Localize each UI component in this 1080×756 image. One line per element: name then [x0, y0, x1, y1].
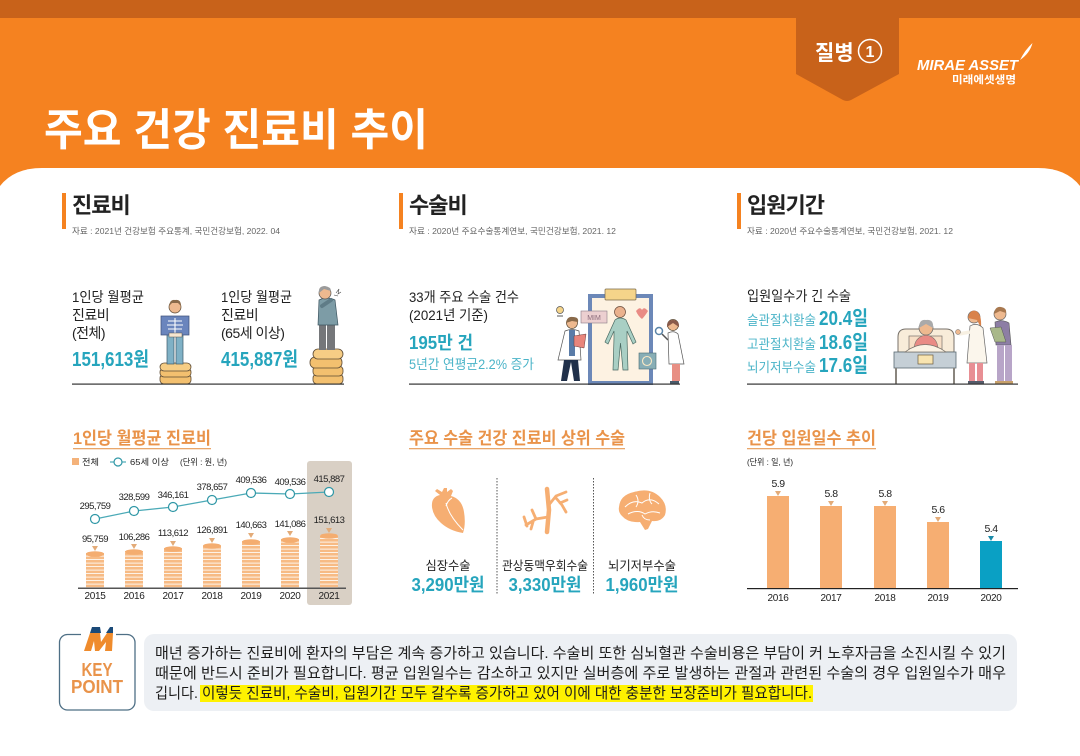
key point badge: POINT	[71, 677, 123, 697]
baseline	[409, 384, 680, 385]
surgery cost: skull base	[606, 559, 678, 595]
stat: long hospital stays: 18.6일	[819, 331, 868, 354]
icon: coronary vessels	[524, 489, 567, 532]
year axis: 2015	[84, 591, 106, 602]
bar chart: length of stay: 5.4	[984, 523, 998, 535]
line values: 328,599	[119, 492, 150, 503]
header band	[0, 0, 1080, 240]
heading: 수술비: 수술비	[409, 193, 467, 218]
baseline	[72, 384, 344, 385]
bar chart: length of stay: 5.8	[824, 488, 838, 500]
stat: long hospital stays: 뇌기저부수술	[747, 360, 816, 375]
stat: 65 and over: 415,887원	[221, 348, 298, 371]
heading: 진료비: 진료비	[72, 193, 130, 218]
stat: long hospital stays	[747, 288, 868, 377]
key point text: 깁니다.	[155, 685, 198, 702]
stat: surgery count	[409, 289, 534, 372]
logo: Mirae Asset	[917, 43, 1032, 86]
column values	[82, 515, 345, 545]
stat: 65 and over	[221, 289, 298, 371]
coin columns	[86, 533, 338, 588]
year axis	[84, 591, 340, 602]
logo: Mirae Asset: 미래에셋생명	[952, 73, 1016, 86]
baseline	[747, 384, 1018, 385]
bar chart: length of stay: 2016	[767, 593, 789, 604]
surgery cost: coronary bypass: 관상동맥우회수술	[502, 559, 588, 573]
chart heading: top surgeries: 주요 수술 건강 진료비 상위 수술	[409, 429, 625, 448]
heading: 입원기간	[737, 193, 953, 236]
year axis: 2018	[201, 591, 223, 602]
year axis: 2019	[240, 591, 262, 602]
icon: man holding x-ray on coins	[160, 300, 191, 384]
stat: 65 and over: 진료비	[221, 307, 258, 323]
line values: 415,887	[314, 474, 345, 485]
icon: patient in bed with doctor and nurse	[894, 307, 1013, 384]
bar chart: length of stay: 5.6	[931, 504, 945, 516]
bar chart: length of stay: 2018	[874, 593, 896, 604]
key point text	[144, 634, 1017, 711]
key point badge: KEY	[82, 660, 112, 680]
legend: 전체	[82, 457, 99, 467]
title: 주요 건강 진료비 추이	[44, 106, 428, 155]
stat: surgery count: 5년간 연평균2.2% 증가	[409, 357, 534, 372]
category ribbon	[796, 18, 899, 101]
heading: 진료비: 자료 : 2021년 건강보험 주요통계, 국민건강보험, 2022. 04	[72, 226, 280, 236]
line values	[80, 474, 345, 512]
line values: 409,536	[236, 475, 267, 486]
column values: 95,759	[82, 534, 108, 545]
key point text: 매년 증가하는 진료비에 환자의 부담은 계속 증가하고 있습니다. 수술비 또한 심뇌혈관 수술비용은 부담이 커 노후자금을 소진시킬 수 있기	[155, 645, 1006, 662]
stat: long hospital stays: 고관절치환술	[747, 337, 816, 352]
legend: (단위 : 원, 년)	[180, 457, 227, 467]
surgery cost: heart	[412, 559, 484, 595]
line values: 378,657	[197, 482, 228, 493]
heading: 진료비	[62, 193, 280, 236]
surgery cost: coronary bypass	[502, 559, 588, 595]
column values: 140,663	[236, 520, 267, 531]
category ribbon: 1	[866, 44, 875, 61]
column values: 141,086	[275, 519, 306, 530]
icon: brain	[619, 490, 666, 530]
key point badge	[60, 627, 135, 710]
surgery cost: skull base: 1,960만원	[606, 575, 678, 595]
stat: surgery count: (2021년 기준)	[409, 307, 488, 323]
stat: surgery count: 33개 주요 수술 건수	[409, 289, 519, 305]
surgery cost: heart: 3,290만원	[412, 575, 484, 595]
chart heading: length of stay: 건당 입원일수 추이	[747, 429, 876, 448]
bar chart: length of stay: 2019	[927, 593, 949, 604]
icon: doctors examining body chart: MIM	[587, 315, 601, 322]
bar chart: length of stay: 5.8	[878, 488, 892, 500]
category ribbon: 질병	[815, 42, 854, 65]
surgery cost: skull base: 뇌기저부수술	[608, 559, 676, 573]
column values: 113,612	[158, 528, 188, 539]
stat: long hospital stays: 슬관절치환술	[747, 313, 816, 328]
heading: 입원기간: 입원기간	[747, 193, 825, 218]
unit note: (단위 : 일, 년)	[747, 457, 793, 467]
stat: all ages: 151,613원	[72, 348, 149, 371]
line markers	[90, 488, 334, 524]
icon: older man with sore shoulder on coins	[310, 286, 343, 384]
icon: heart	[432, 488, 465, 533]
column values: 106,286	[119, 532, 150, 543]
stat: long hospital stays: 17.6일	[819, 354, 868, 377]
bar chart: length of stay: 5.9	[771, 478, 785, 490]
line values: 409,536	[275, 477, 306, 488]
stat: long hospital stays: 20.4일	[819, 307, 868, 330]
column values: 151,613	[314, 515, 345, 526]
stat: all ages: 1인당 월평균	[72, 289, 144, 305]
heading: 수술비	[399, 193, 616, 236]
column values: 126,891	[197, 525, 228, 536]
icon: doctors examining body chart	[556, 289, 684, 384]
line values: 346,161	[158, 490, 189, 501]
stat: all ages: (전체)	[72, 325, 105, 341]
chart heading: monthly cost: 1인당 월평균 진료비	[73, 429, 211, 448]
bar chart: length of stay: 2020	[980, 593, 1002, 604]
key point text: 때문에 반드시 준비가 필요합니다. 평균 입원일수는 감소하고 있지만 실버층에 주로 발생하는 관절과 관련된 수술의 경우 입원일수가 매우	[155, 665, 1006, 682]
bar chart: length of stay	[747, 478, 1018, 604]
value markers	[92, 528, 332, 551]
stat: 65 and over: 1인당 월평균	[221, 289, 292, 305]
line: 65 and over	[95, 492, 329, 519]
heading: 수술비: 자료 : 2020년 주요수술통계연보, 국민건강보험, 2021. 12	[409, 226, 616, 236]
year axis: 2016	[123, 591, 145, 602]
line values: 295,759	[80, 501, 111, 512]
year axis: 2021	[318, 591, 340, 602]
combo chart: monthly cost 2015–2021	[78, 461, 352, 605]
legend: 65세 이상	[130, 457, 169, 467]
stat: surgery count: 195만 건	[409, 333, 473, 353]
bar chart: length of stay: 2017	[820, 593, 842, 604]
logo: Mirae Asset: MIRAE ASSET	[917, 58, 1019, 74]
key point text: 이렇듯 진료비, 수술비, 입원기간 모두 갈수록 증가하고 있어 이에 대한 충분한 보장준비가 필요합니다.	[202, 685, 812, 702]
surgery cost: heart: 심장수술	[426, 559, 470, 573]
stat: all ages: 진료비	[72, 307, 109, 323]
stat: all ages	[72, 289, 149, 371]
surgery cost: coronary bypass: 3,330만원	[508, 575, 582, 595]
stat: long hospital stays: 입원일수가 긴 수술	[747, 288, 851, 304]
year axis: 2020	[279, 591, 301, 602]
heading: 입원기간: 자료 : 2020년 주요수술통계연보, 국민건강보험, 2021. 12	[747, 226, 953, 236]
year axis: 2017	[162, 591, 184, 602]
legend	[72, 457, 227, 467]
stat: 65 and over: (65세 이상)	[221, 325, 284, 341]
